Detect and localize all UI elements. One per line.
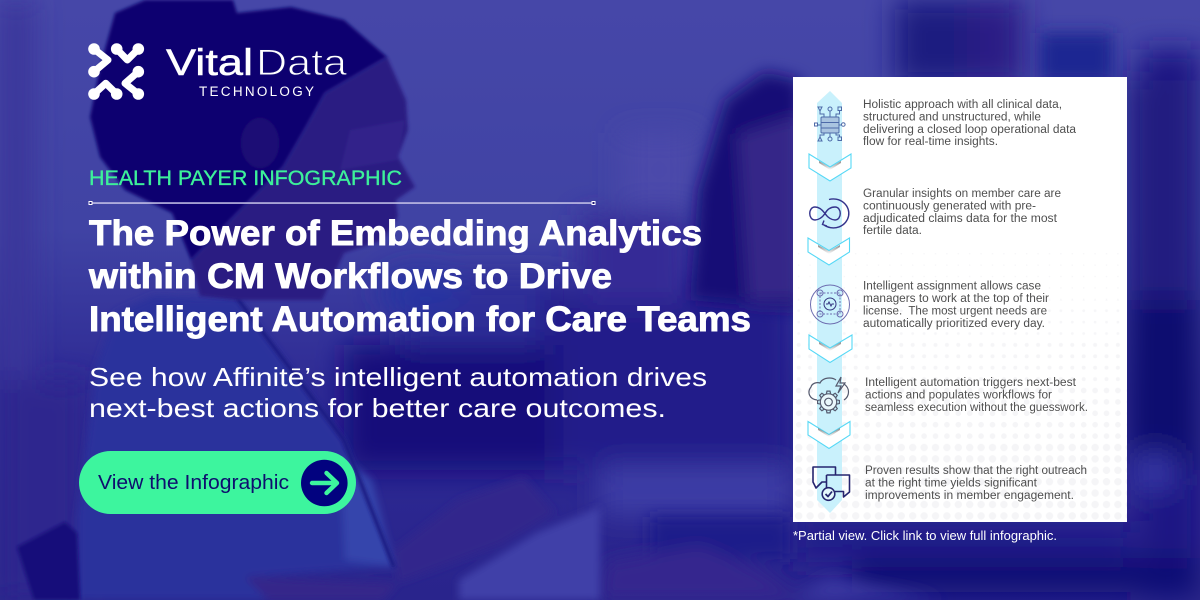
text: holistic approach: flow for real-time insights. [863,136,998,148]
text: granular insights: Granular insights on member care are [863,188,1061,200]
text: intelligent automation: seamless execution without the guesswork. [865,402,1088,414]
text: proven results: at the right time yields significant [865,478,1038,490]
text: intelligent assignment: license. The most urgent needs are [863,306,1047,318]
divider line [89,202,595,204]
icon: intelligent assignment circle [810,285,850,324]
text: proven results: Proven results show that the right outreach [865,465,1087,477]
nurse scrubs and arm [77,296,600,600]
panel: infographic preview [793,77,1127,522]
text: intelligent automation: actions and populates workflows for [865,390,1052,402]
eyebrow label: HEALTH PAYER INFOGRAPHIC [89,167,402,190]
logo: VitalData Technology [88,42,347,100]
chevron 1 [809,154,851,181]
text: intelligent assignment: Intelligent assignment allows case [863,280,1041,292]
text: intelligent assignment [863,280,1049,330]
icon: arrow in circle [301,460,348,506]
text: intelligent assignment: automatically prioritized every day. [863,318,1045,330]
headline: Intelligent Automation for Care Teams [89,300,751,339]
text: granular insights: fertile data. [863,225,922,237]
text: proven results [865,465,1087,502]
dot pattern [793,245,1127,522]
logo wordmark [166,42,347,83]
headline [88,214,751,339]
logo wordmark: Data [256,42,347,83]
button: view the infographic: View the Infographic [98,472,289,494]
text: holistic approach: Holistic approach with all clinical data, [863,99,1062,111]
footnote: *Partial view. Click link to view full infographic. [793,529,1057,543]
nurse face and neck [191,57,415,300]
headline: within CM Workflows to Drive [88,257,612,296]
button: view the infographic [79,451,356,514]
subheading: next-best actions for better care outcomes. [89,393,666,423]
nurse hair [90,0,387,260]
flow arrow band [817,91,842,513]
logo wordmark: Vital [166,42,253,83]
text: intelligent automation: Intelligent automation triggers next-best [865,377,1077,389]
nurse chair and stethoscope [17,298,394,600]
text: holistic approach: structured and unstructured, while [863,112,1041,124]
text: proven results: improvements in member engagement. [865,490,1074,502]
text: holistic approach [863,99,1077,148]
icon: infinity loop [810,199,849,228]
icon: speech bubbles with check [813,467,850,500]
text: intelligent automation [865,377,1088,414]
subheading [89,362,707,423]
chevron 3 [809,335,852,362]
text: granular insights: adjudicated claims data for the most [863,213,1058,225]
icon: data server network [814,107,845,141]
text: intelligent assignment: managers to work at the top of their [863,293,1049,305]
logo tagline: TECHNOLOGY [199,84,314,99]
subheading: See how Affinitē’s intelligent automation drives [89,362,707,392]
text: granular insights: continuously generated with pre- [863,200,1036,212]
icon: logo network mark [88,43,144,100]
icon: cloud with gear [809,377,848,413]
text: granular insights [863,188,1061,237]
headline: The Power of Embedding Analytics [89,214,702,253]
text: holistic approach: delivering a closed loop operational data [863,124,1077,136]
chevron 2 [808,238,850,265]
chevron 4 [808,422,850,448]
